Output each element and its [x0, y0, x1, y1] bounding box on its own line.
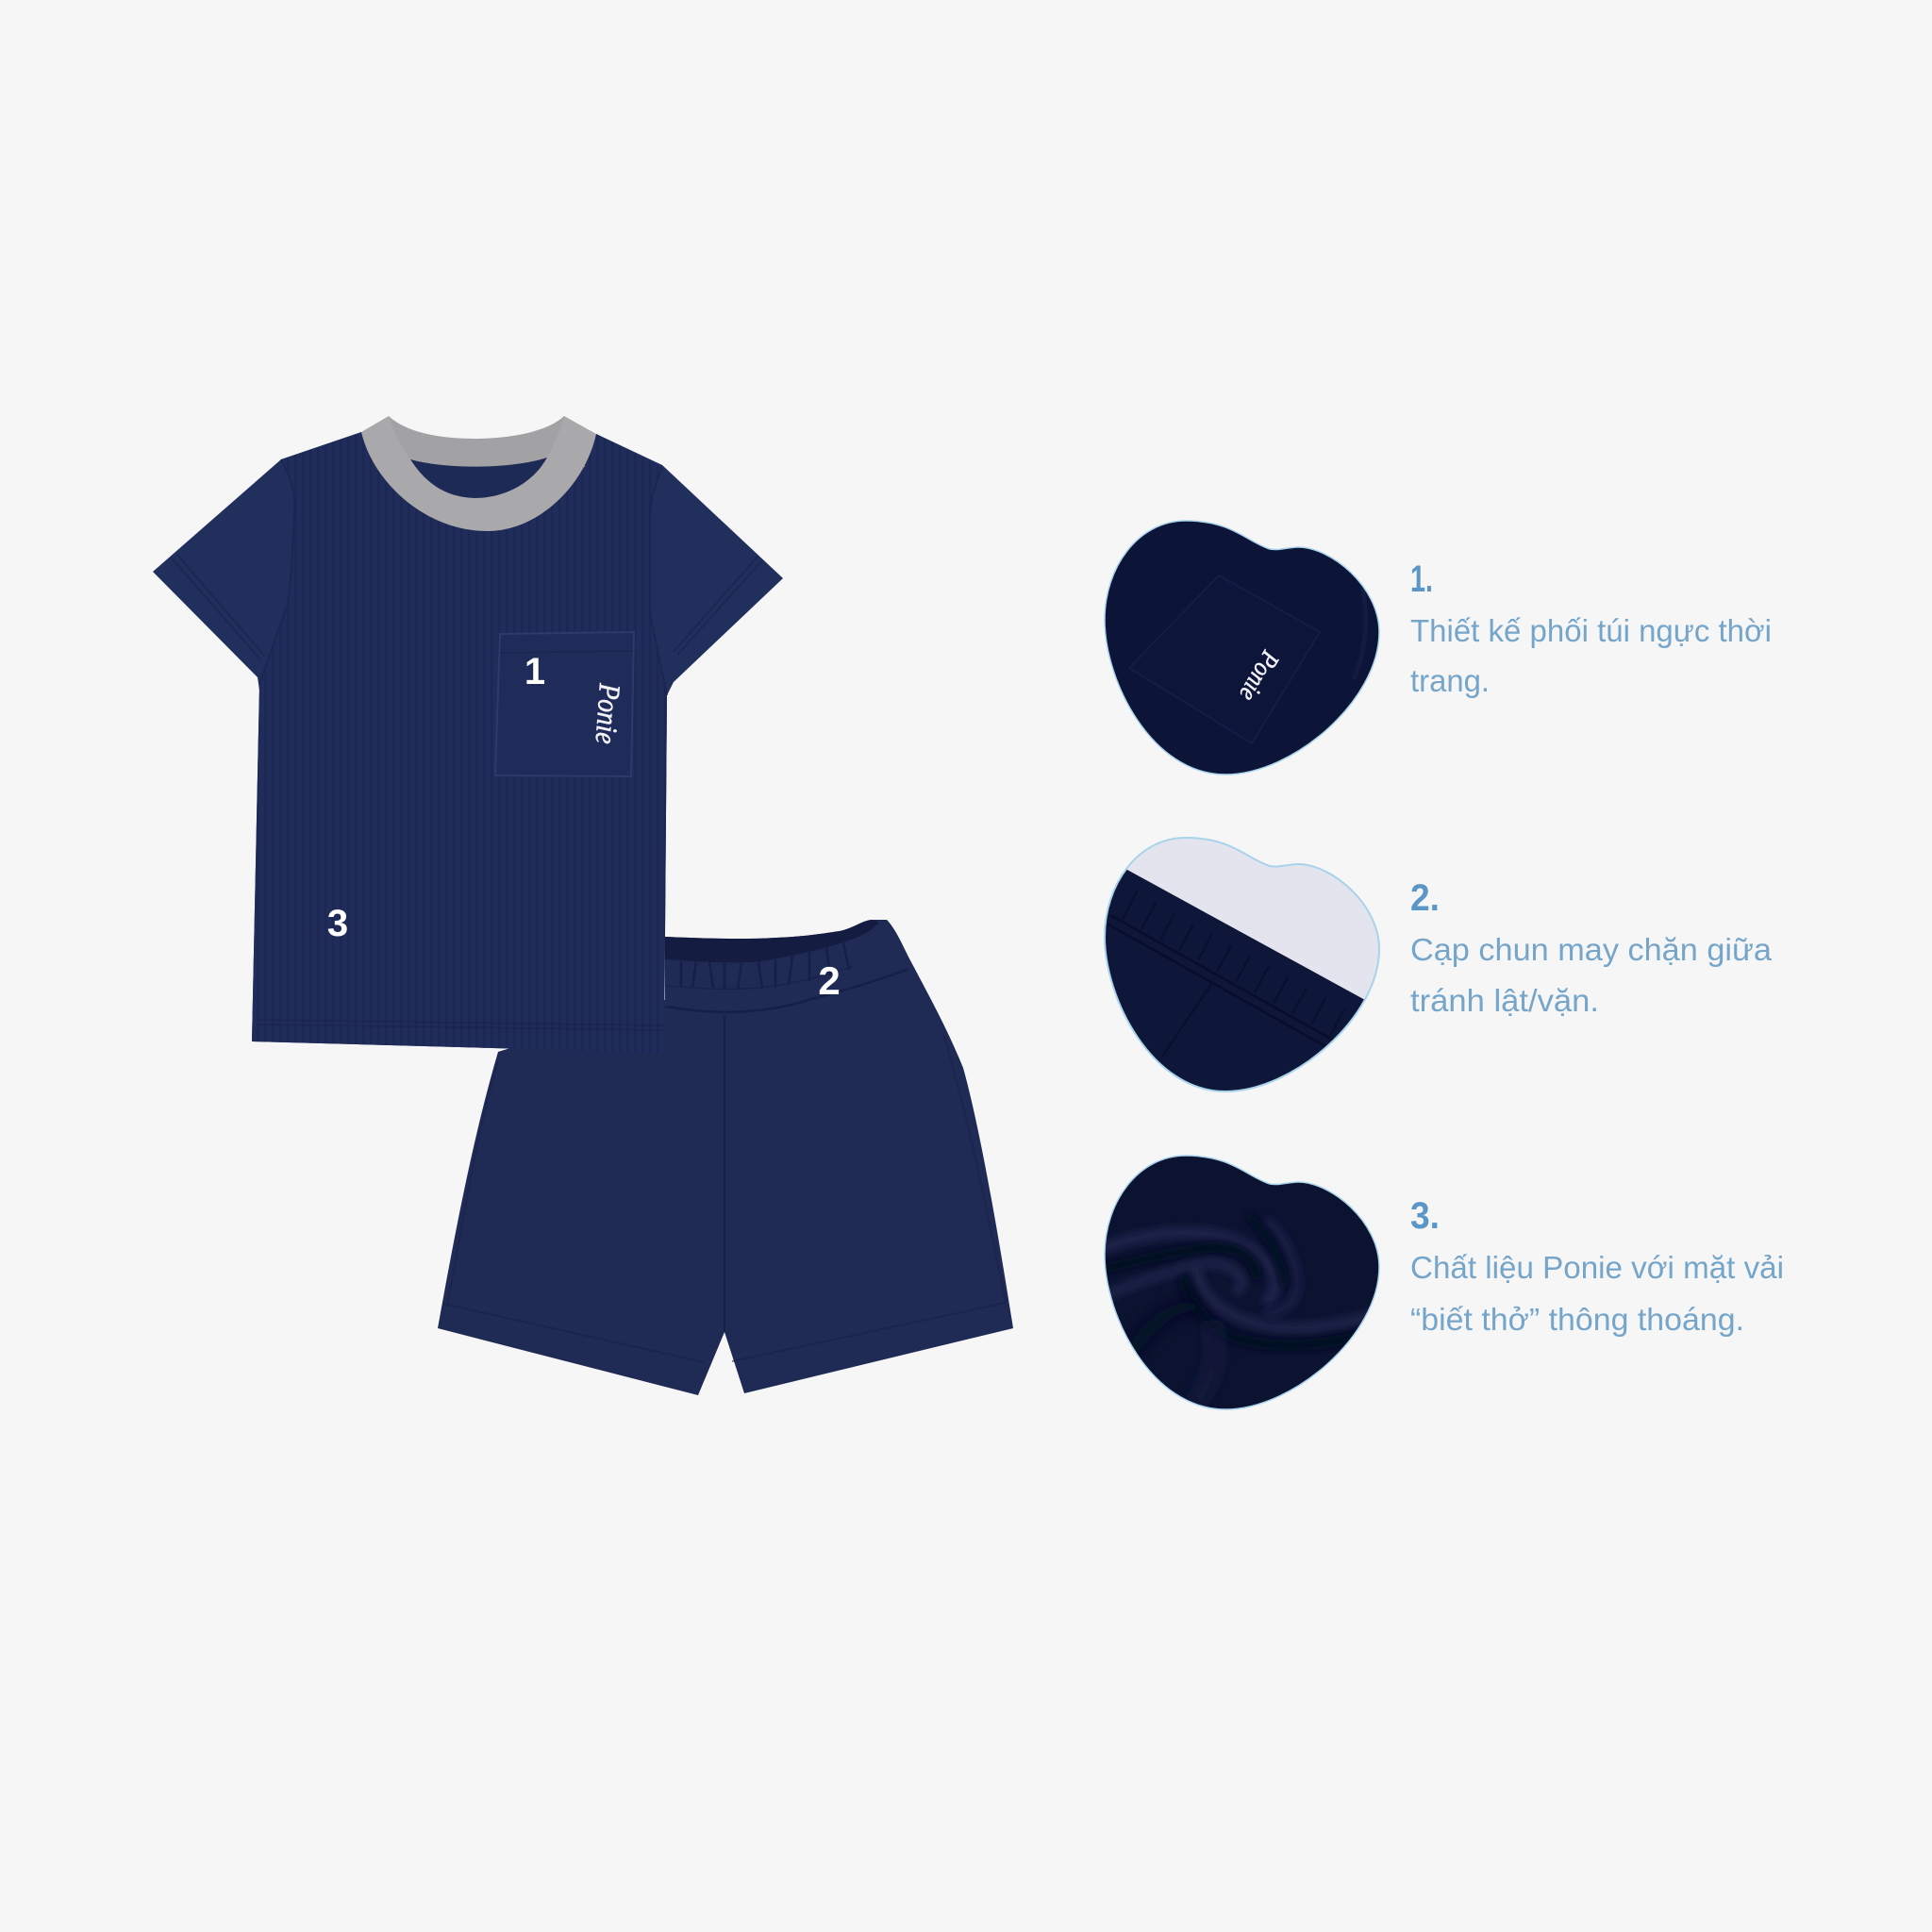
shirt pocket — [495, 632, 634, 776]
description 1 — [1410, 613, 1772, 698]
description 1: Thiết kế phối túi ngực thời — [1410, 613, 1772, 648]
shirt silhouette — [153, 432, 783, 1053]
pocket logo: Ponie — [590, 682, 627, 745]
number 3: 3. — [1410, 1195, 1440, 1237]
marker 1: 1 — [525, 651, 545, 692]
heart outline — [1105, 1156, 1379, 1409]
heart image: waistband — [1106, 839, 1378, 1091]
panel: detail 1 — [1094, 509, 1772, 783]
number 2: 2. — [1410, 877, 1440, 919]
shirt ribbed body — [252, 432, 667, 1053]
shorts inner waistband — [665, 920, 879, 962]
description 3 — [1410, 1250, 1784, 1337]
shorts — [438, 920, 1013, 1395]
description 2 — [1410, 932, 1773, 1018]
collar back — [389, 416, 585, 467]
heart image: pocket — [1106, 521, 1379, 774]
panel: detail 3 — [1094, 1146, 1784, 1420]
pocket stitch — [500, 651, 633, 653]
heart outline — [1105, 521, 1379, 774]
description 3: Chất liệu Ponie với mặt vải — [1410, 1250, 1784, 1285]
heart image: pocket: Ponie — [1233, 645, 1285, 706]
shorts body — [438, 920, 1013, 1395]
shorts waistband gathers — [443, 942, 1006, 1362]
shirt seams — [173, 459, 762, 1030]
collar front — [361, 416, 596, 531]
t-shirt — [153, 416, 783, 1053]
number 1: 1. — [1410, 558, 1433, 600]
heart image: fabric swirl — [1106, 1157, 1379, 1409]
description 3: “biết thở” thông thoáng. — [1410, 1302, 1744, 1337]
collar interior — [410, 458, 547, 498]
description 2: tránh lật/vặn. — [1410, 983, 1599, 1018]
marker 2: 2 — [818, 958, 841, 1003]
panel: detail 2 — [1085, 830, 1773, 1104]
description 1: trang. — [1410, 663, 1490, 698]
heart outline — [1105, 838, 1379, 1091]
marker 3: 3 — [327, 903, 348, 944]
description 2: Cạp chun may chặn giữa — [1410, 932, 1773, 967]
